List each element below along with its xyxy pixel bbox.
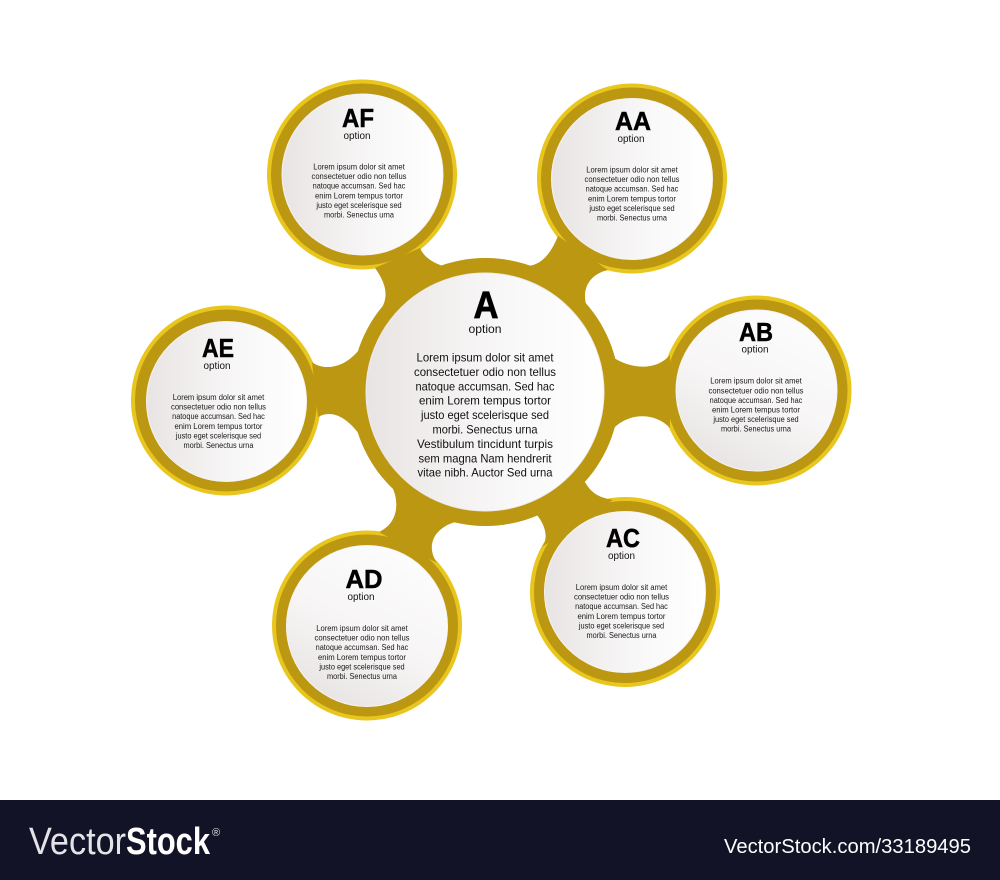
panel: AF: [267, 80, 457, 309]
panel: AC: morbi. Senectus urna: [586, 631, 657, 640]
panel: AD: justo eget scelerisque sed: [318, 662, 405, 671]
panel: AE: morbi. Senectus urna: [184, 441, 254, 450]
panel: AC: AC: [606, 523, 640, 553]
panel: AF: consectetuer odio non tellus: [312, 172, 406, 181]
panel: AA: Lorem ipsum dolor sit amet: [586, 166, 678, 174]
panel: AA: consectetuer odio non tellus: [584, 175, 680, 184]
footer bar: ®: [212, 827, 220, 839]
panel: AD: option: [348, 592, 374, 603]
panel: AE: enim Lorem tempus tortor: [174, 422, 263, 431]
panel: AF: natoque accumsan. Sed hac: [313, 182, 405, 191]
panel: AF: option: [344, 131, 370, 142]
panel: AA: enim Lorem tempus tortor: [588, 194, 676, 203]
panel: AD: Lorem ipsum dolor sit amet: [316, 624, 408, 633]
panel: AB: consectetuer odio non tellus: [708, 386, 804, 395]
panel: AE: [131, 306, 359, 496]
panel: AA: [526, 84, 727, 304]
panel: AC: enim Lorem tempus tortor: [578, 612, 666, 621]
panel: AE: Lorem ipsum dolor sit amet: [173, 393, 265, 402]
panel: AA: option: [618, 134, 644, 145]
panel: AB: Lorem ipsum dolor sit amet: [710, 377, 802, 386]
panel: AD: AD: [346, 564, 382, 594]
panel: AE: consectetuer odio non tellus: [171, 403, 266, 412]
panel: central hub A: Lorem ipsum dolor sit amet: [416, 350, 554, 364]
panel: AA: AA: [615, 106, 651, 136]
panel: AF: morbi. Senectus urna: [324, 210, 394, 220]
footer bar: Vector: [29, 821, 126, 863]
panel: AB: justo eget scelerisque sed: [712, 415, 799, 424]
panel: central hub A: vitae nibh. Auctor Sed urna: [418, 466, 553, 480]
footer bar: [0, 800, 1000, 880]
panel: central hub A: justo eget scelerisque sed: [420, 408, 549, 422]
panel: AB: enim Lorem tempus tortor: [712, 406, 800, 414]
panel: AD: [272, 489, 462, 720]
panel: central hub A: Vestibulum tincidunt turpis: [417, 437, 553, 451]
panel: AC: consectetuer odio non tellus: [574, 593, 669, 602]
panel: central hub A: enim Lorem tempus tortor: [419, 394, 551, 408]
panel: central hub A: A: [474, 285, 498, 327]
panel: AF: Lorem ipsum dolor sit amet: [313, 162, 405, 172]
panel: AB: [612, 296, 852, 486]
panel: AD: consectetuer odio non tellus: [314, 634, 410, 643]
panel: AB: option: [742, 345, 768, 356]
panel: AE: AE: [202, 333, 234, 363]
panel: AD: morbi. Senectus urna: [327, 672, 397, 681]
panel: AA: natoque accumsan. Sed hac: [586, 185, 678, 194]
panel: central hub A: natoque accumsan. Sed hac: [416, 379, 554, 393]
footer bar: Stock: [126, 821, 211, 863]
panel: AC: option: [608, 551, 635, 562]
panel: AD: enim Lorem tempus tortor: [318, 653, 406, 662]
panel: AA: morbi. Senectus urna: [597, 214, 667, 222]
panel: AE: option: [204, 361, 230, 372]
panel: AF: enim Lorem tempus tortor: [315, 191, 403, 200]
panel: AA: justo eget scelerisque sed: [588, 204, 675, 213]
panel: AB: AB: [739, 317, 773, 347]
panel: AC: justo eget scelerisque sed: [578, 621, 664, 630]
panel: central hub A: option: [468, 322, 502, 336]
panel: AC: Lorem ipsum dolor sit amet: [576, 583, 668, 592]
panel: AD: natoque accumsan. Sed hac: [316, 643, 408, 652]
panel: AE: justo eget scelerisque sed: [175, 431, 261, 440]
footer bar: VectorStock.com/33189495: [724, 836, 971, 858]
panel: central hub A: consectetuer odio non tellus: [414, 365, 556, 379]
panel: central hub A: sem magna Nam hendrerit: [418, 451, 552, 465]
panel: AE: natoque accumsan. Sed hac: [172, 412, 265, 421]
panel: central hub A: [352, 258, 620, 526]
panel: AC: natoque accumsan. Sed hac: [575, 602, 668, 611]
panel: AB: natoque accumsan. Sed hac: [710, 396, 802, 405]
panel: AF: AF: [342, 103, 374, 133]
panel: AC: [530, 482, 720, 687]
panel: AF: justo eget scelerisque sed: [315, 201, 402, 210]
panel: central hub A: morbi. Senectus urna: [432, 422, 538, 436]
panel: AB: morbi. Senectus urna: [721, 425, 791, 434]
